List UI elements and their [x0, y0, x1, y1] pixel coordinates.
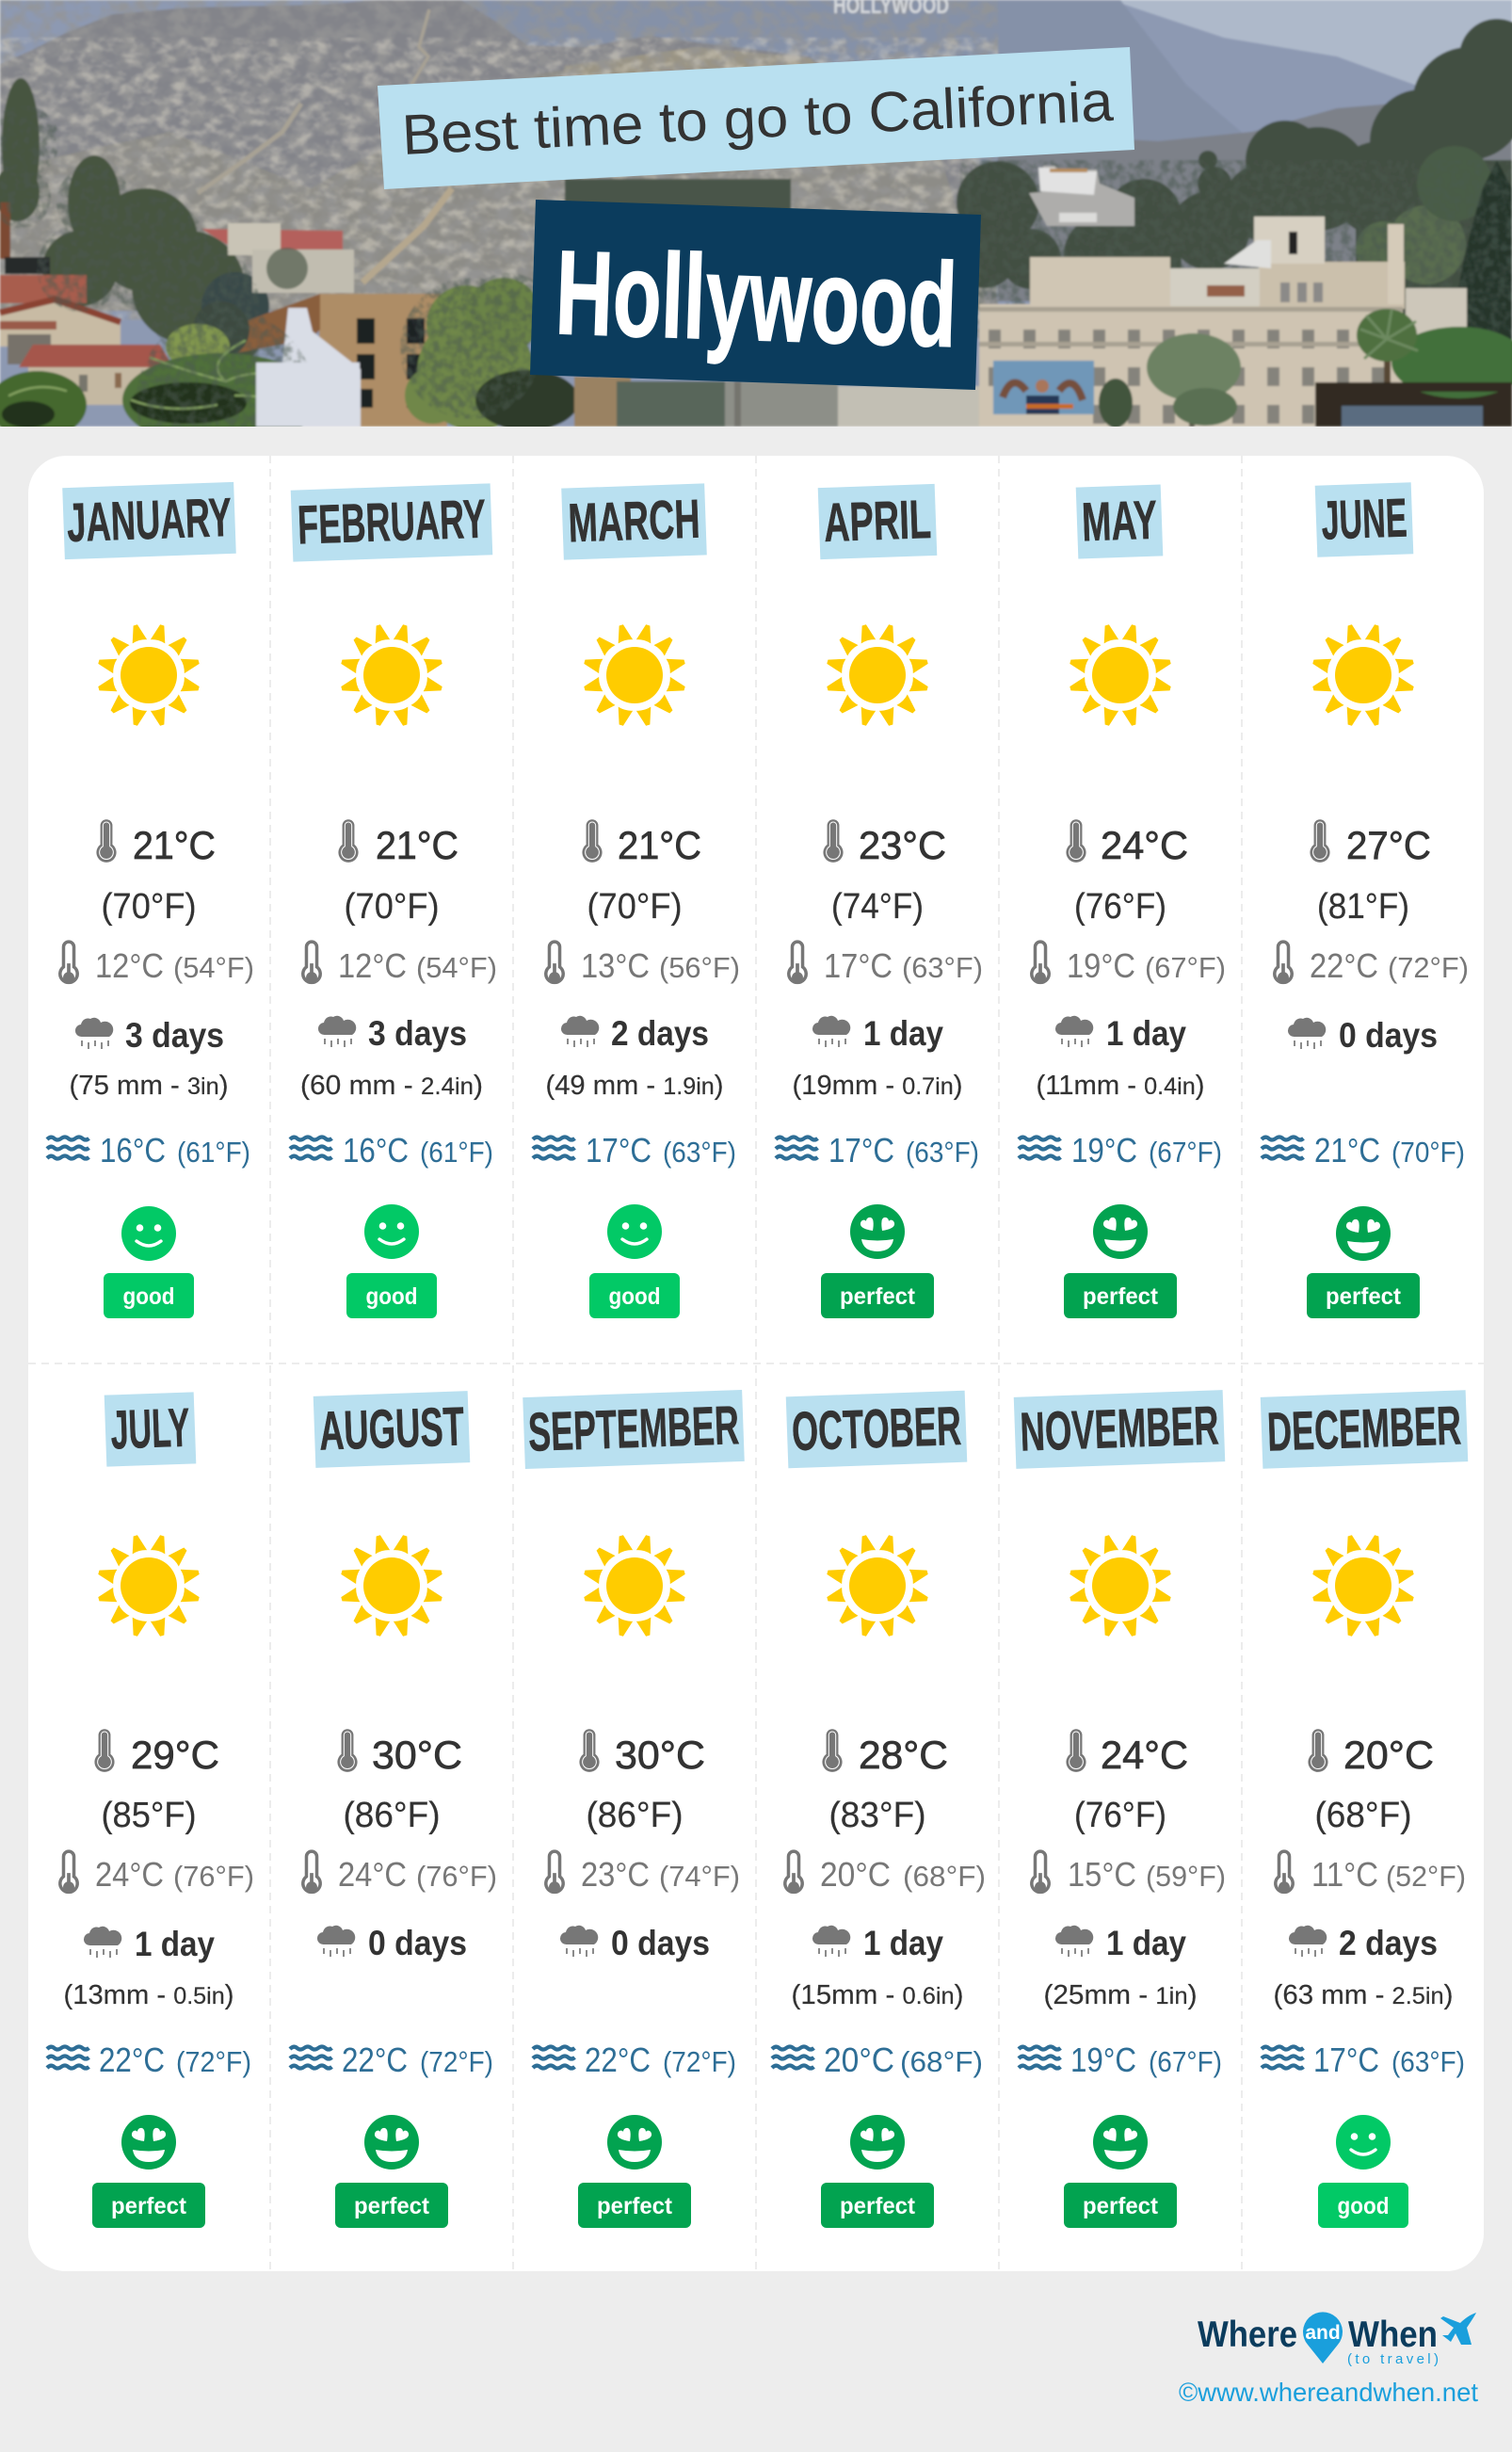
middle trees: [416, 337, 531, 427]
rainy days: 1 day: [863, 1924, 943, 1962]
max temperature: 30°C: [615, 1733, 705, 1777]
max temperature: 20°C: [1343, 1733, 1434, 1777]
min temperature: 23°C: [581, 1855, 650, 1894]
min temperature: 24°C: [95, 1855, 164, 1894]
max temperature fahrenheit: (83°F): [828, 1796, 926, 1835]
icon: map pin: [1303, 2312, 1343, 2363]
max temperature: 23°C: [859, 823, 946, 867]
sea temperature: (68°F): [900, 2045, 983, 2078]
rainy days: [75, 1016, 224, 1055]
sea temperature: 22°C: [99, 2041, 165, 2079]
panel: August: [290, 1391, 497, 2228]
min temperature: (67°F): [1145, 951, 1226, 984]
month label: May: MAY: [1081, 490, 1158, 553]
rainy days: [318, 1014, 467, 1053]
rainy days: [84, 1925, 215, 1963]
right palms and shrubs: [1391, 327, 1512, 398]
rating: good: [1318, 2115, 1408, 2228]
title banner: Best time to go to California: Best time to go to California: [400, 70, 1115, 167]
rating: perfect: perfect: [840, 2193, 916, 2219]
month label: January: [62, 482, 236, 559]
max temperature fahrenheit: (74°F): [831, 887, 924, 927]
month label: May: [1076, 484, 1163, 559]
max temperature fahrenheit: (81°F): [1317, 887, 1409, 927]
month label: September: [523, 1390, 745, 1469]
rainy days: 1 day: [135, 1925, 215, 1963]
rainy days: 3 days: [125, 1016, 224, 1055]
max temperature: [338, 819, 458, 867]
rainy days: [560, 1924, 710, 1962]
rating: good: good: [608, 1283, 661, 1310]
icon: sun: [1311, 1534, 1415, 1637]
rainy days: [1055, 1014, 1186, 1053]
rainy days: 2 days: [611, 1014, 709, 1053]
month label: November: [1014, 1390, 1225, 1469]
max temperature: [1310, 819, 1431, 867]
min temperature: (63°F): [902, 951, 983, 984]
sea temperature: (61°F): [420, 1136, 493, 1169]
rainfall amount: (19mm - 0.7in): [793, 1071, 962, 1101]
rainy days: 1 day: [1106, 1924, 1186, 1962]
month label: August: AUGUST: [318, 1395, 465, 1462]
right main building: [979, 304, 1403, 427]
rainfall amount: (15mm - 0.6in): [791, 1980, 963, 2010]
sea temperature: [290, 2041, 493, 2079]
min temperature: 11°C: [1311, 1855, 1378, 1894]
month label: March: MARCH: [567, 489, 701, 554]
sea temperature: 20°C: [824, 2041, 894, 2079]
min temperature: [1032, 942, 1226, 985]
billboard: [993, 361, 1094, 414]
sea temperature: (63°F): [1391, 2045, 1465, 2078]
max temperature: [1066, 1729, 1188, 1777]
rainfall amount: (13mm - 0.5in): [64, 1980, 234, 2010]
title banner: Best time to go to California: [378, 47, 1134, 189]
left palms: [0, 369, 88, 427]
icon: sun: [1069, 1534, 1172, 1637]
rainy days: [561, 1014, 709, 1053]
max temperature: 24°C: [1101, 823, 1188, 867]
panel: February: [290, 483, 497, 1318]
icon: sun: [97, 1534, 201, 1637]
rainfall amount: (63 mm - 2.5in): [1273, 1980, 1454, 2010]
rainfall amount: (49 mm - 1.9in): [546, 1071, 723, 1101]
min temperature: [60, 1851, 254, 1894]
sea temperature: 17°C: [1313, 2041, 1379, 2079]
website credit: ©www.whereandwhen.net: [1179, 2378, 1478, 2407]
min temperature: 19°C: [1067, 946, 1135, 985]
month label: June: [1315, 482, 1413, 557]
max temperature: 24°C: [1101, 1733, 1188, 1777]
sea temperature: 19°C: [1070, 2041, 1136, 2079]
rainy days: 2 days: [1339, 1924, 1438, 1962]
sea temperature: (61°F): [177, 1136, 250, 1169]
max temperature: 21°C: [618, 823, 701, 867]
sea temperature: (72°F): [176, 2045, 251, 2078]
month label: April: [818, 484, 937, 559]
max temperature fahrenheit: (86°F): [586, 1796, 684, 1835]
sea temperature: [533, 2041, 736, 2079]
min temperature: (54°F): [416, 951, 497, 984]
panel: October: [772, 1391, 986, 2228]
max temperature fahrenheit: (70°F): [102, 887, 196, 927]
month label: October: OCTOBER: [791, 1395, 962, 1462]
icon: airplane: [1440, 2313, 1476, 2345]
trees behind right building: [956, 17, 1512, 315]
panel: November: [1014, 1390, 1226, 2228]
month label: July: JULY: [109, 1397, 191, 1460]
rainy days: [1055, 1924, 1186, 1962]
rating: perfect: perfect: [354, 2193, 430, 2219]
icon: sun: [340, 623, 443, 727]
rating: good: good: [1337, 2193, 1390, 2219]
sea temperature: [1019, 1131, 1222, 1170]
rating: good: [104, 1206, 194, 1318]
rainfall amount: (75 mm - 3in): [70, 1071, 228, 1101]
max temperature: [579, 1729, 705, 1777]
sea temperature: [772, 2041, 983, 2079]
month label: October: [786, 1391, 967, 1468]
rating: perfect: perfect: [1326, 1283, 1402, 1310]
rating: perfect: perfect: [1083, 1283, 1159, 1310]
rating: perfect: [821, 2115, 934, 2228]
sea temperature: [47, 1131, 250, 1170]
rating: perfect: [578, 2115, 691, 2228]
panel: January: [47, 482, 254, 1318]
left houses: [0, 275, 87, 303]
panel: July: [47, 1392, 254, 2228]
min temperature: [1276, 1851, 1466, 1894]
max temperature: 29°C: [131, 1733, 219, 1777]
rating: perfect: perfect: [597, 2193, 673, 2219]
texture overlay: foliage on the left: [0, 108, 533, 426]
rating: perfect: perfect: [1083, 2193, 1159, 2219]
sea temperature: 17°C: [586, 1131, 651, 1170]
max temperature: [1308, 1729, 1434, 1777]
min temperature: 22°C: [1310, 946, 1378, 985]
icon: sun: [583, 623, 686, 727]
rainy days: 0 days: [1339, 1016, 1438, 1055]
panel: March: [533, 483, 740, 1318]
max temperature: [94, 1729, 219, 1777]
min temperature: (56°F): [659, 951, 740, 984]
min temperature: [1275, 942, 1469, 985]
rainy days: 1 day: [1106, 1014, 1186, 1053]
rating: perfect: [92, 2115, 205, 2228]
min temperature: [303, 942, 497, 985]
icon: sun: [583, 1534, 686, 1637]
sea temperature: 17°C: [828, 1131, 894, 1170]
panel: June: [1262, 482, 1469, 1318]
sea temperature: 19°C: [1071, 1131, 1137, 1170]
rainfall amount: (25mm - 1in): [1043, 1980, 1198, 2010]
min temperature: [785, 1851, 986, 1894]
sea temperature: (67°F): [1149, 1136, 1222, 1169]
min temperature: [546, 942, 740, 985]
sea temperature: [1019, 2041, 1222, 2079]
min temperature: 17°C: [824, 946, 893, 985]
sea temperature: (72°F): [420, 2045, 493, 2078]
max temperature: 21°C: [376, 823, 458, 867]
rating: perfect: perfect: [111, 2193, 187, 2219]
rainy days: 1 day: [863, 1014, 943, 1053]
max temperature fahrenheit: (70°F): [345, 887, 439, 927]
min temperature: (59°F): [1146, 1860, 1226, 1893]
black sign: [1314, 390, 1512, 427]
sea temperature: [1262, 1131, 1465, 1170]
rating: good: good: [365, 1283, 418, 1310]
sea temperature: (72°F): [663, 2045, 736, 2078]
sea temperature: 16°C: [100, 1131, 166, 1170]
panel: December: [1261, 1390, 1468, 2228]
rating: good: good: [122, 1283, 175, 1310]
logo: Where and When (to travel): [1198, 2312, 1476, 2367]
icon: sun: [97, 623, 201, 727]
max temperature fahrenheit: (70°F): [587, 887, 682, 927]
logo: Where and When (to travel): Where: [1198, 2315, 1297, 2355]
month label: April: APRIL: [823, 489, 932, 554]
rating: good: [589, 1204, 680, 1318]
panel: May: [1019, 484, 1226, 1318]
min temperature: (72°F): [1388, 951, 1469, 984]
rating: perfect: [1307, 1206, 1420, 1318]
rainy days: [1289, 1924, 1438, 1962]
max temperature fahrenheit: (76°F): [1074, 1796, 1166, 1835]
texture overlay: foliage on the right: [960, 159, 1512, 339]
max temperature: 30°C: [372, 1733, 462, 1777]
rainy days: 3 days: [368, 1014, 467, 1053]
panel: September: [523, 1390, 745, 2228]
min temperature: (68°F): [903, 1860, 986, 1893]
logo: Where and When (to travel): When: [1348, 2315, 1438, 2355]
max temperature fahrenheit: (76°F): [1074, 887, 1166, 927]
min temperature: 12°C: [338, 946, 407, 985]
max temperature: 28°C: [859, 1733, 948, 1777]
min temperature: (76°F): [416, 1860, 497, 1893]
min temperature: 12°C: [95, 946, 164, 985]
max temperature: [1066, 819, 1188, 867]
icon: sun: [1069, 623, 1172, 727]
min temperature: (52°F): [1386, 1860, 1466, 1893]
sea temperature: [533, 1131, 736, 1170]
rating: perfect: [1064, 1204, 1177, 1318]
title banner: Hollywood: [530, 200, 981, 390]
min temperature: 24°C: [338, 1855, 407, 1894]
max temperature: [822, 1729, 948, 1777]
max temperature fahrenheit: (85°F): [102, 1796, 196, 1835]
sea temperature: 16°C: [343, 1131, 409, 1170]
rating: perfect: perfect: [840, 1283, 916, 1310]
rating: perfect: [335, 2115, 448, 2228]
month label: July: [105, 1392, 196, 1467]
min temperature: (54°F): [173, 951, 254, 984]
max temperature: 21°C: [133, 823, 216, 867]
texture overlay: hillside blotches: [0, 0, 998, 320]
month label: February: [291, 483, 492, 562]
max temperature: [96, 819, 216, 867]
icon: map pin: and: [1305, 2322, 1341, 2344]
rating: perfect: [821, 1204, 934, 1318]
min temperature: 13°C: [581, 946, 650, 985]
sea temperature: (63°F): [663, 1136, 736, 1169]
sea temperature: [290, 1131, 493, 1170]
max temperature fahrenheit: (86°F): [343, 1796, 441, 1835]
rating: perfect: [1064, 2115, 1177, 2228]
rainy days: 0 days: [611, 1924, 710, 1962]
min temperature: 15°C: [1068, 1855, 1136, 1894]
month label: June: JUNE: [1320, 487, 1408, 552]
rainy days: [317, 1924, 467, 1962]
sea temperature: 22°C: [342, 2041, 408, 2079]
min temperature: [1032, 1851, 1226, 1894]
min temperature: [60, 942, 254, 985]
sea temperature: [776, 1131, 979, 1170]
mansion behind trees: [201, 229, 343, 250]
rating: good: [346, 1204, 437, 1318]
max temperature: 27°C: [1346, 823, 1431, 867]
sea temperature: (70°F): [1391, 1136, 1465, 1169]
logo: Where and When (to travel): (to travel): [1347, 2351, 1439, 2367]
sea temperature: [47, 2041, 251, 2079]
month label: September: SEPTEMBER: [527, 1395, 740, 1463]
rainy days: [1288, 1016, 1438, 1055]
brown building: [319, 294, 447, 427]
sea temperature: 22°C: [585, 2041, 651, 2079]
sea temperature: [1262, 2041, 1465, 2079]
icon: sun: [1311, 623, 1415, 727]
rainfall amount: (11mm - 0.4in): [1036, 1071, 1205, 1101]
min temperature: (76°F): [173, 1860, 254, 1893]
min temperature: [546, 1851, 740, 1894]
title banner: Hollywood: Hollywood: [554, 225, 959, 372]
icon: sun: [826, 1534, 929, 1637]
panel: April: [776, 484, 983, 1318]
min temperature: (74°F): [659, 1860, 740, 1893]
max temperature fahrenheit: (68°F): [1314, 1796, 1412, 1835]
rainy days: [812, 1014, 943, 1053]
month label: March: [561, 483, 707, 560]
icon: sun: [826, 623, 929, 727]
icon: sun: [340, 1534, 443, 1637]
min temperature: [303, 1851, 497, 1894]
rainy days: 0 days: [368, 1924, 467, 1962]
month label: February: FEBRUARY: [297, 489, 487, 556]
rainy days: [812, 1924, 943, 1962]
month label: January: JANUARY: [66, 487, 233, 554]
sea temperature: 21°C: [1314, 1131, 1380, 1170]
min temperature: 20°C: [820, 1855, 891, 1894]
sea temperature: (67°F): [1149, 2045, 1222, 2078]
max temperature: [582, 819, 701, 867]
hillside house: [1029, 166, 1134, 226]
white church gable: [281, 306, 363, 427]
rainfall amount: (60 mm - 2.4in): [300, 1071, 483, 1101]
max temperature: [823, 819, 946, 867]
max temperature: [337, 1729, 462, 1777]
left trees: [0, 78, 264, 367]
white calendar panel: [28, 456, 1484, 2271]
min temperature: [789, 942, 983, 985]
hero photo: Hollywood hills and buildings: [0, 0, 1512, 447]
sea temperature: (63°F): [906, 1136, 979, 1169]
month label: November: NOVEMBER: [1019, 1395, 1220, 1463]
month label: August: [314, 1391, 470, 1468]
